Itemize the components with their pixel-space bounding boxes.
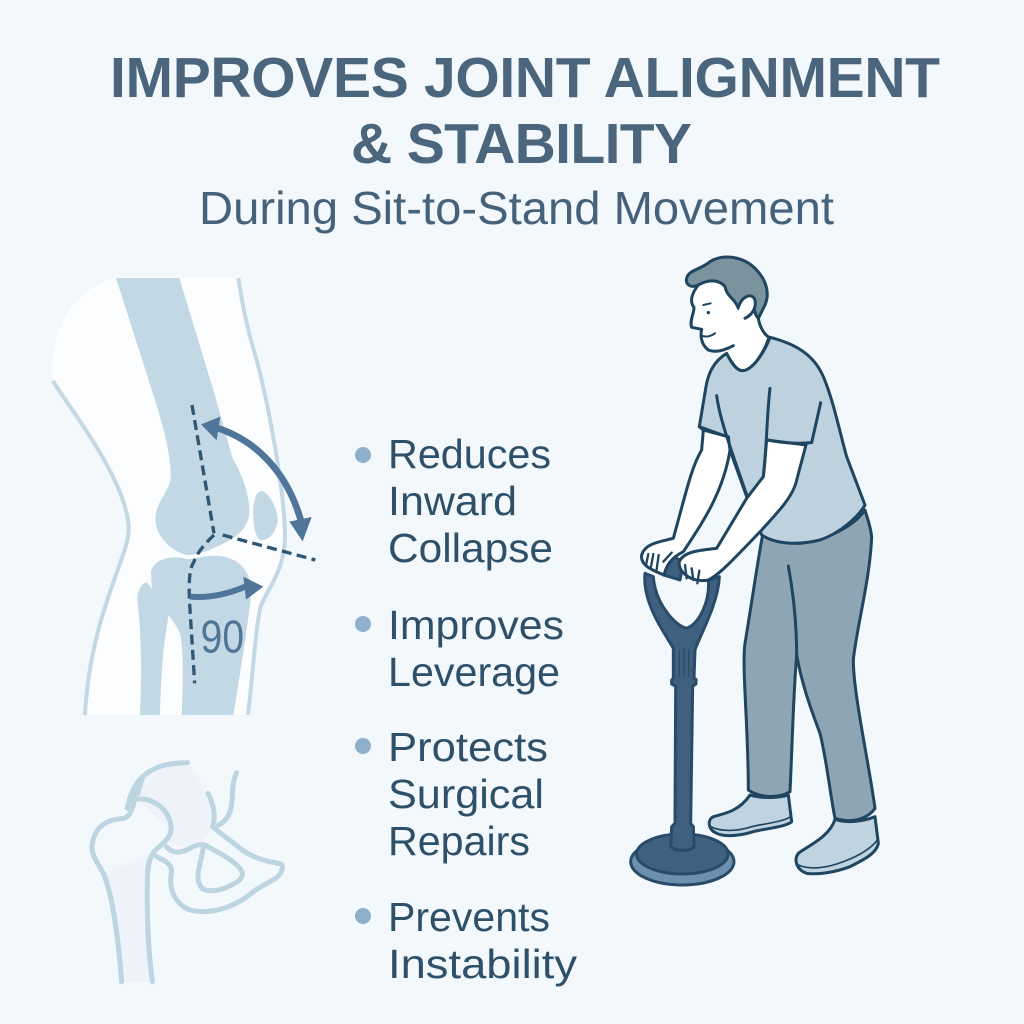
near arm [679,440,806,581]
panel: hip joint diagram [92,763,282,982]
leg silhouette [52,277,285,715]
face [703,303,715,337]
sleeve details [699,388,821,497]
patella [253,491,278,540]
bullet: prevents instability: Prevents [388,894,550,940]
bullet: improves leverage: Leverage [388,649,560,695]
pelvis and shaft fill [137,763,213,847]
tibia [151,556,252,715]
pole detail lines [679,648,689,677]
far arm [642,430,730,575]
panel: knee joint diagram [52,277,315,715]
torso, head and arms [642,257,865,583]
t-shirt [699,337,865,543]
bullet: protects surgical repairs [355,724,548,864]
bullet: reduces inward collapse: Reduces [388,431,551,477]
bullet: prevents instability: Instability [388,941,578,987]
bullet: protects surgical repairs: Repairs [388,818,530,864]
panel: person using stand-assist handle [631,257,878,885]
base [631,838,734,885]
leg outline [53,278,285,715]
subtitle: During Sit-to-Stand Movement [199,182,834,234]
head and neck [691,280,769,371]
bone outline [92,763,282,982]
title [110,46,940,176]
title: IMPROVES JOINT ALIGNMENT [110,46,940,110]
double arrow [201,417,312,541]
bullet: prevents instability [355,894,578,987]
stand-assist handle [631,573,734,885]
dashed axis lines [189,405,315,683]
trousers and shoes [709,510,878,874]
title: & STABILITY [351,112,692,176]
grip bar [662,557,683,580]
panel: benefits list [355,431,578,987]
angle label: 90 [201,611,244,663]
bullet: reduces inward collapse: Collapse [388,525,553,571]
femur [116,278,249,555]
bullet: improves leverage [355,602,564,695]
fibula [137,582,169,715]
ear [738,296,755,318]
pole and grip frame [645,573,719,850]
bullet: reduces inward collapse: Inward [388,478,517,524]
finger lines [646,553,699,583]
lower arrow [190,577,263,600]
wedge [125,772,147,808]
bullet: reduces inward collapse [355,431,553,571]
bullet: protects surgical repairs: Protects [388,724,548,770]
bullet: improves leverage: Improves [388,602,564,648]
hair [686,257,767,318]
bullet: protects surgical repairs: Surgical [388,771,544,817]
